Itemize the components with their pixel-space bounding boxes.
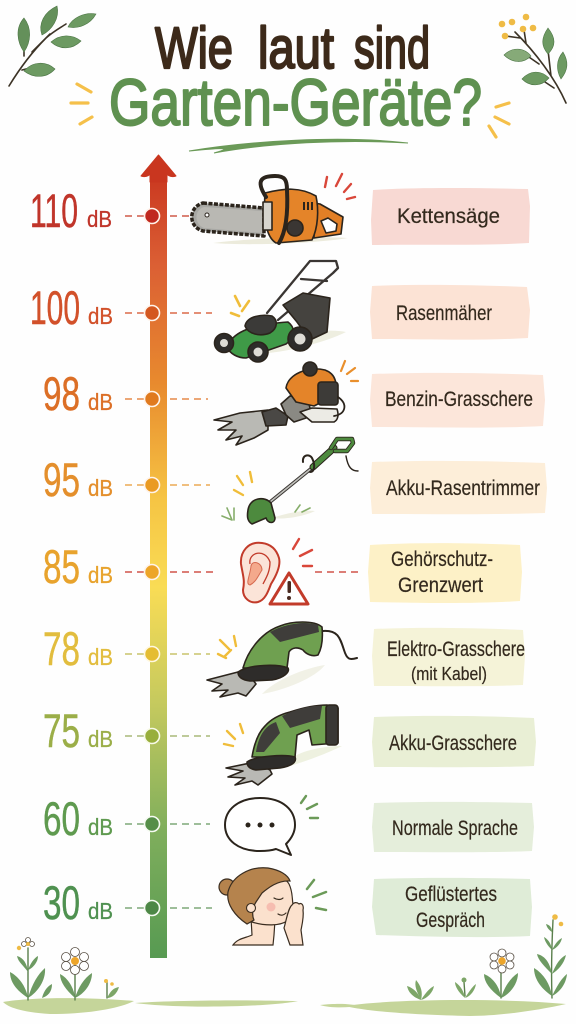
value 100 dB: 100 [30, 281, 80, 334]
label: Rasenmäher: Rasenmäher [396, 302, 492, 325]
row: 78 dB [43, 622, 210, 675]
marker [144, 564, 160, 580]
value 30 dB: dB [88, 898, 113, 924]
marker [144, 900, 160, 916]
label: Elektro-Grasschere (mit Kabel) [372, 628, 525, 686]
icon: corded electric shears [207, 622, 357, 697]
marker [144, 306, 160, 320]
value 78 dB: 78 [43, 622, 80, 675]
icon: ear with warning triangle [241, 539, 312, 604]
connector [125, 653, 210, 655]
value 60 dB: dB [88, 814, 113, 840]
row: 75 dB [43, 704, 210, 757]
plants bottom left [10, 938, 119, 1000]
label: Geflüstertes Gespräch [372, 878, 532, 937]
label: Elektro-Grasschere (mit Kabel): (mit Kabel) [411, 664, 487, 684]
icon: speech bubble [225, 796, 318, 855]
leaf sprig top left [9, 6, 96, 86]
title line 2: Garten-Geräte? [109, 65, 482, 139]
label: Akku-Rasentrimmer [370, 461, 547, 514]
row: 100 dB [30, 281, 212, 334]
connector [125, 312, 212, 314]
value 85 dB: 85 [43, 540, 80, 593]
label: Akku-Grasschere: Akku-Grasschere [389, 732, 517, 755]
marker [144, 478, 160, 492]
connector [125, 484, 210, 486]
label: Geflüstertes Gespräch: Geflüstertes [405, 883, 497, 906]
row: 95 dB [43, 453, 210, 506]
connector [125, 907, 212, 909]
marker [144, 816, 160, 832]
label: Normale Sprache [372, 802, 534, 852]
label: Benzin-Grasschere [370, 373, 545, 428]
ground grass strip [3, 998, 566, 1016]
marker [144, 728, 160, 744]
value 98 dB: dB [88, 389, 113, 415]
row: 98 dB [43, 367, 208, 420]
row: 30 dB [43, 876, 212, 929]
title line 1 [155, 16, 430, 81]
icon: chainsaw [192, 174, 355, 244]
label: Geflüstertes Gespräch: Gespräch [416, 909, 485, 932]
icon: cordless shears [224, 705, 342, 785]
value 75 dB: 75 [43, 704, 80, 757]
value 100 dB: dB [88, 303, 113, 329]
scale bar [150, 172, 167, 958]
flower sprig top right [499, 14, 567, 103]
label: Gehörschutz-Grenzwert: Grenzwert [398, 574, 483, 597]
value 110 dB: dB [87, 206, 112, 232]
connector [125, 823, 210, 825]
value 30 dB: 30 [43, 876, 80, 929]
label: Elektro-Grasschere (mit Kabel): Elektro-Grasschere [387, 638, 525, 661]
icon: petrol hedge shears [214, 361, 358, 445]
icon: grass trimmer [222, 439, 358, 524]
connector [125, 735, 210, 737]
title line 1: sind [354, 16, 430, 81]
label: Akku-Grasschere [372, 716, 536, 767]
title line 1: Wie [155, 16, 233, 81]
value 95 dB: 95 [43, 453, 80, 506]
label: Gehörschutz-Grenzwert [368, 543, 522, 603]
marker [144, 208, 160, 224]
title sparks right [489, 103, 509, 137]
title underline brush stroke [189, 139, 408, 153]
label: Normale Sprache: Normale Sprache [392, 817, 518, 840]
icon: lawn mower [214, 261, 346, 362]
value 98 dB: 98 [43, 367, 80, 420]
value 75 dB: dB [88, 726, 113, 752]
value 78 dB: dB [88, 644, 113, 670]
marker [144, 646, 160, 662]
arrow head [141, 155, 176, 182]
label: Kettensäge: Kettensäge [397, 205, 500, 228]
title [109, 16, 482, 139]
row: 60 dB [43, 792, 210, 845]
icon: whispering woman [219, 868, 326, 945]
title sparks left [71, 84, 92, 124]
marker [144, 392, 160, 406]
value 110 dB: 110 [30, 184, 78, 237]
value 60 dB: 60 [43, 792, 80, 845]
connector [125, 571, 362, 573]
row: 85 dB [43, 540, 362, 593]
plants bottom right [407, 914, 567, 1000]
scale arrow [141, 155, 176, 958]
value 85 dB: dB [88, 562, 113, 588]
label: Rasenmäher [370, 285, 530, 340]
connector [125, 398, 208, 400]
label: Akku-Rasentrimmer: Akku-Rasentrimmer [386, 477, 540, 500]
row: 110 dB [30, 184, 192, 237]
connector [125, 215, 192, 217]
value 95 dB: dB [88, 475, 113, 501]
title line 1: laut [258, 16, 334, 81]
label: Benzin-Grasschere: Benzin-Grasschere [385, 388, 533, 411]
label: Kettensäge [371, 188, 530, 245]
label: Gehörschutz-Grenzwert: Gehörschutz- [391, 548, 493, 571]
